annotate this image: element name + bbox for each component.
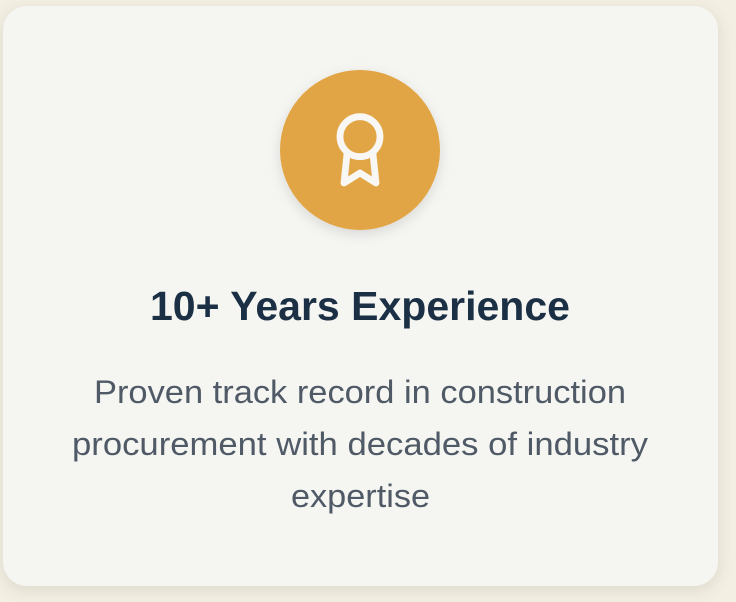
text block: description: expertise: [291, 478, 430, 514]
text block: description: [72, 374, 649, 514]
icon: award medal badge: [280, 70, 440, 230]
text block: description: procurement with decades of industry: [72, 426, 649, 462]
text block: description: Proven track record in construction: [94, 374, 626, 410]
heading: 10+ Years Experience: [150, 283, 570, 329]
